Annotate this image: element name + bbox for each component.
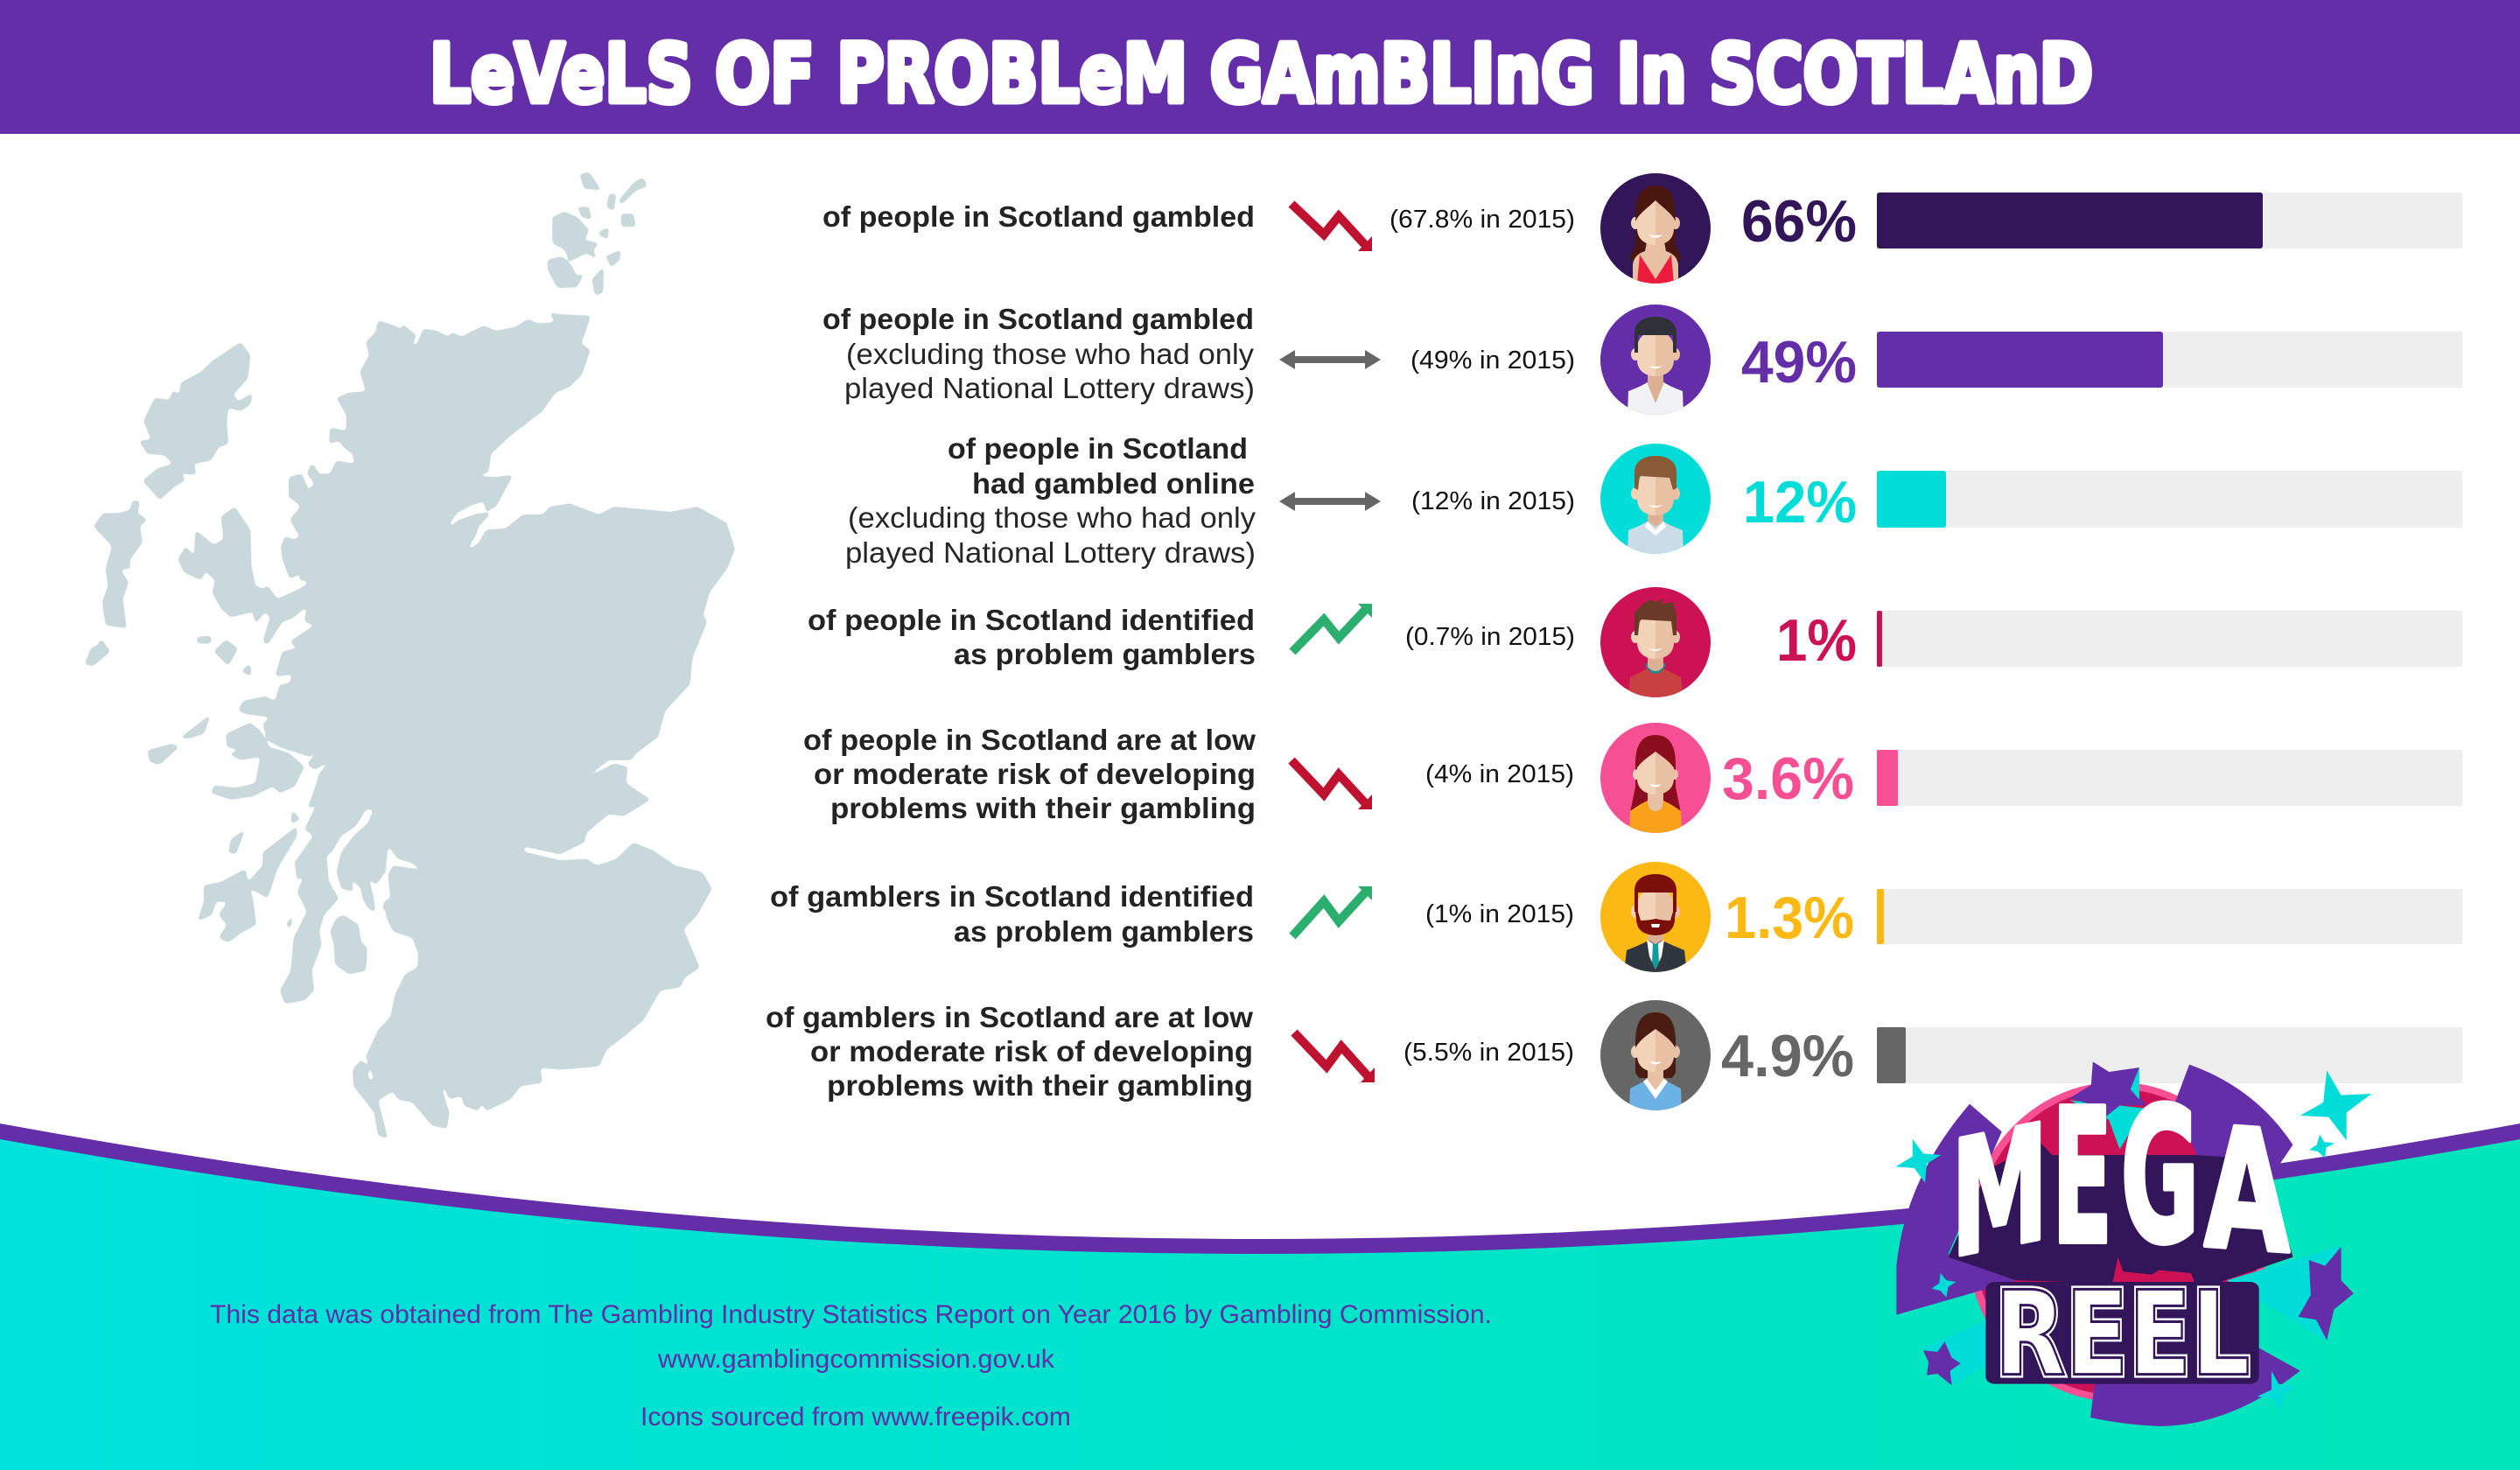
row 7 label: or moderate risk of developing [810,1035,1253,1068]
2015 value: (49% in 2015) [1410,346,1575,374]
row 3 label: played National Lottery draws) [845,536,1256,569]
2015 value: (4% in 2015) [1425,760,1574,788]
map of Scotland [85,172,735,1138]
2015 value: (0.7% in 2015) [1405,623,1575,651]
row 6: 1.3% [770,862,2462,972]
logo: Mega Reel [1896,1061,2371,1426]
row 1 label: of people in Scotland gambled [822,200,1255,233]
row 6 label: of gamblers in Scotland identified [770,880,1254,913]
avatar: man in white shirt [1600,304,1711,415]
row 3 label: of people in Scotland [948,432,1248,465]
progress bar [1877,332,2462,388]
2015 value: (5.5% in 2015) [1404,1039,1574,1067]
row 5 label: problems with their gambling [830,792,1256,824]
logo: Mega Reel: REEL [1995,1267,2250,1403]
row 4: 1% [808,587,2462,697]
avatar: woman in orange [1600,723,1711,833]
row 7 label [766,1001,1253,1102]
footer credits: This data was obtained from The Gambling Industry Statistics Report on Year 2016 by Gambling Commission. [210,1300,1492,1329]
logo: Mega Reel: REEL [1995,1267,2250,1403]
row 6 label [770,880,1254,948]
2015 value: (12% in 2015) [1411,487,1575,515]
progress bar [1877,889,2462,944]
avatar: bearded man in suit [1600,862,1711,972]
logo: Mega Reel: E [2052,1070,2112,1286]
icon: trend up [1292,604,1372,652]
row 1: 66% [822,173,2462,284]
footer wave [0,1124,2520,1470]
row 3 label [845,432,1256,569]
footer credits: www.gamblingcommission.gov.uk [657,1345,1055,1374]
row 3 label: (excluding those who had only [848,501,1256,534]
logo: Mega Reel: G [2120,1069,2200,1285]
avatar: man with spiky hair [1600,587,1711,697]
percentage: 66% [1741,188,1857,255]
row 2 label: of people in Scotland gambled [822,303,1254,335]
percentage: 1.3% [1725,885,1854,951]
logo: Mega Reel: A [2204,1092,2290,1292]
icon: trend down [1294,1032,1375,1082]
progress bar [1877,750,2462,806]
row 5 label: of people in Scotland are at low [803,724,1256,756]
percentage: 49% [1741,329,1857,396]
row 5 label [803,724,1256,824]
icon: no change [1279,492,1381,511]
icon: trend down [1292,204,1372,251]
progress bar [1877,471,2462,528]
row 2: 49% [822,303,2462,415]
icon: trend up [1292,886,1372,936]
row 3 label: had gambled online [972,467,1255,500]
row 2 label [822,303,1255,404]
row 7 label: problems with their gambling [827,1069,1253,1102]
row 4 label: of people in Scotland identified [808,604,1255,636]
percentage: 1% [1776,607,1857,674]
row 2 label: played National Lottery draws) [844,372,1255,404]
progress bar [1877,611,2462,667]
avatar: woman in blue [1600,1000,1711,1110]
percentage: 12% [1743,469,1857,536]
footer credits [210,1300,1492,1432]
row 4 label [808,604,1256,670]
2015 value: (67.8% in 2015) [1390,206,1575,234]
logo: Mega Reel: M [1951,1090,2048,1294]
row 2 label: (excluding those who had only [846,338,1255,370]
icon: no change [1279,350,1381,369]
avatar: man with brown hair [1600,444,1711,554]
percentage: 3.6% [1722,746,1854,812]
row 5 label: or moderate risk of developing [814,758,1256,790]
progress bar [1877,192,2462,248]
row 4 label: as problem gamblers [954,638,1256,670]
row 7 label: of gamblers in Scotland are at low [766,1001,1253,1033]
percentage: 4.9% [1721,1023,1854,1089]
row 6 label: as problem gamblers [954,915,1254,948]
icon: trend down [1292,760,1372,809]
row 7: 4.9% [766,1000,2462,1110]
footer credits: Icons sourced from www.freepik.com [640,1403,1071,1432]
row 3: 12% [845,432,2462,569]
avatar: woman in red [1600,173,1711,284]
2015 value: (1% in 2015) [1425,900,1574,928]
header banner [0,0,2520,134]
progress bar [1877,1027,2462,1083]
row 5: 3.6% [803,723,2462,833]
title: LeVeLS OF PROBLeM GAmBLInG In SCOTLAnD [430,27,2093,121]
